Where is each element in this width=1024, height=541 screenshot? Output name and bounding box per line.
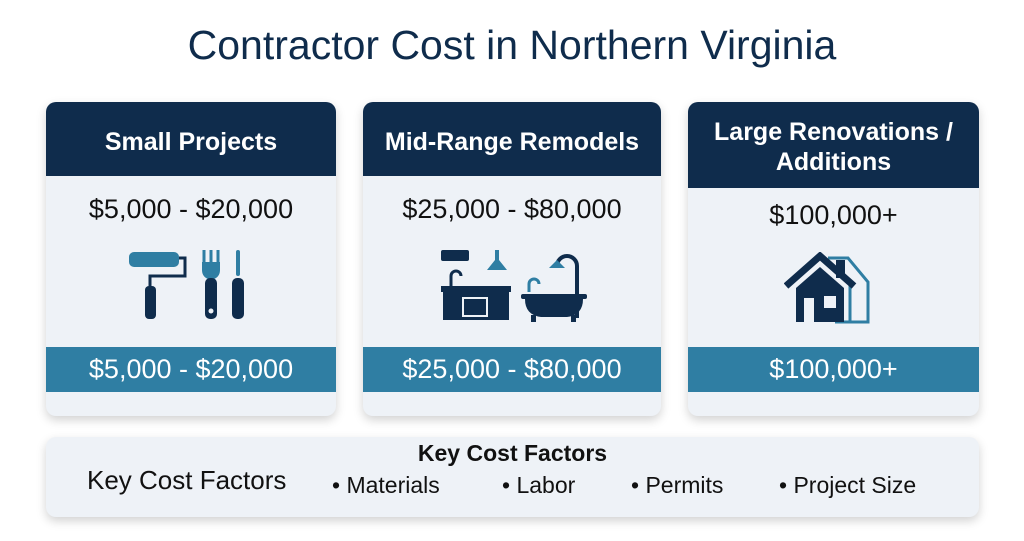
list: factors	[332, 472, 916, 498]
list: factors: • Materials	[332, 472, 440, 498]
panel: mid-range remodels	[363, 102, 661, 416]
list: factors: • Permits	[631, 472, 723, 498]
price band: mid-range: $25,000 - $80,000	[402, 354, 622, 384]
price: large: $100,000+	[769, 200, 898, 230]
heading: large renovations	[688, 102, 979, 188]
price: mid-range: $25,000 - $80,000	[402, 194, 622, 224]
title: Contractor Cost in Northern Virginia	[188, 22, 836, 68]
heading: large renovations: Additions	[776, 148, 891, 176]
icon: house with addition	[784, 252, 870, 324]
heading: small projects	[46, 102, 336, 176]
price band: large: $100,000+	[769, 354, 898, 384]
panel: small projects	[46, 102, 336, 416]
price: small projects: $5,000 - $20,000	[89, 194, 293, 224]
heading: large renovations: Large Renovations /	[714, 118, 953, 146]
list: factors: • Labor	[502, 472, 575, 498]
icon: tools	[129, 250, 244, 319]
price band: small projects: $5,000 - $20,000	[89, 354, 293, 384]
heading: key cost factors: Key Cost Factors	[418, 440, 607, 466]
price band: mid-range	[363, 347, 661, 392]
label: key cost factors: Key Cost Factors	[87, 465, 286, 495]
list: factors: • Project Size	[779, 472, 916, 498]
price band: small projects	[46, 347, 336, 392]
price band: large	[688, 347, 979, 392]
panel: key cost factors	[46, 437, 979, 517]
icon: kitchen and bathtub	[441, 250, 587, 322]
panel: large renovations	[688, 102, 979, 416]
heading: small projects: Small Projects	[105, 128, 277, 156]
heading: mid-range remodels: Mid-Range Remodels	[385, 128, 639, 156]
heading: mid-range remodels	[363, 102, 661, 176]
